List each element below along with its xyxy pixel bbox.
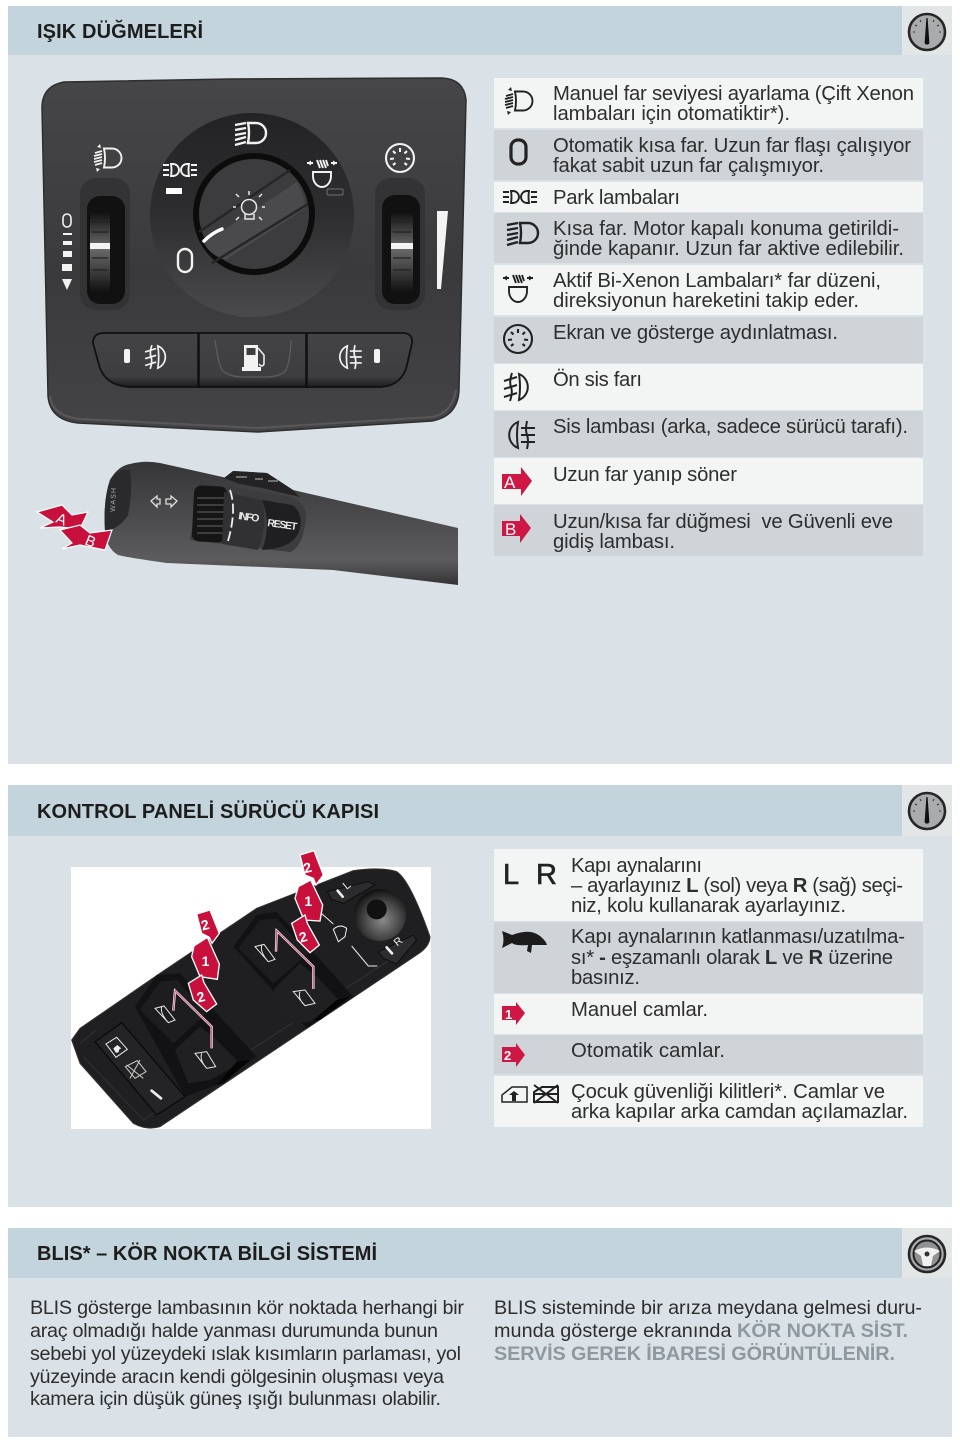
row: L R mirror select: L	[503, 859, 519, 891]
door switch photo: 1	[304, 893, 312, 909]
red arrows right group	[292, 851, 323, 953]
row: automatic: Otomatik kısa far. Uzun far flaşı çalışıyor	[553, 135, 911, 157]
row: manual windows: Manuel camlar.	[571, 999, 708, 1021]
row: B beam switch: Uzun/kısa far düğmesi ve Güvenli eve	[553, 511, 893, 533]
rotary disc	[150, 113, 354, 317]
left thumbwheel	[80, 178, 130, 310]
steering stalk photo: RESET	[267, 517, 299, 533]
legend table: light switches	[494, 78, 923, 556]
stalk callout arrows A and B	[37, 505, 112, 551]
steering stalk photo	[105, 462, 458, 585]
row: front fog	[494, 364, 923, 410]
text: right column: SERVİS GEREK İBARESİ GÖRÜNTÜLENİR.	[494, 1342, 895, 1365]
row: L R mirror select: – ayarlayınız L (sol) veya R (sağ) seçi-	[571, 875, 903, 897]
thumb wheel	[192, 485, 227, 543]
stalk callout arrows A and B: B	[83, 532, 98, 551]
row: automatic windows	[494, 1035, 923, 1074]
rotary knob	[193, 153, 315, 275]
text: left column: sebebi yol yüzeydeki ıslak kısımların parlaması, yol	[30, 1343, 461, 1365]
row: mirror folding: basınız.	[571, 967, 640, 989]
row: child safety	[494, 1076, 923, 1127]
row: rear fog	[494, 411, 923, 457]
panel: driver door control panel	[8, 785, 952, 1207]
row: automatic windows: Otomatik camlar.	[571, 1040, 725, 1062]
legend table: door control	[494, 849, 923, 1127]
row: L R mirror select: R	[536, 859, 557, 891]
heading bar: light switches	[8, 6, 952, 55]
text: left column: BLIS gösterge lambasının kör noktada herhangi bir	[30, 1297, 464, 1319]
stalk callout arrows A and B: A	[54, 510, 69, 529]
text: left column: kamera için düşük güneş ışığı bulunması olabilir.	[30, 1388, 441, 1410]
heading bar: BLIS	[8, 1228, 952, 1278]
heading bar: door control: KONTROL PANELİ SÜRÜCÜ KAPISI	[37, 800, 379, 823]
row: automatic windows: 2	[504, 1048, 511, 1063]
door switch photo: 1	[202, 953, 210, 969]
row: mirror folding: Kapı aynalarının katlanması/uzatılma-	[571, 926, 905, 948]
door switch photo: 2	[199, 916, 211, 934]
row: child safety: arka kapılar arka camdan açılamazlar.	[571, 1101, 908, 1123]
text: left column: araç olmadığı halde yanması durumunda bunun	[30, 1320, 438, 1342]
text: left column: yüzeyinde aracın kendi gölgesinin oluşması veya	[30, 1366, 444, 1388]
mirror control: R	[392, 935, 405, 949]
row: L R mirror select: niz, kolu kullanarak ayarlayınız.	[571, 895, 846, 917]
row: B beam switch: gidiş lambası.	[553, 531, 675, 553]
steering stalk photo: WASH	[110, 488, 118, 512]
row: rear fog: Sis lambası (arka, sadece sürücü tarafı).	[553, 416, 908, 438]
heading bar: door control	[8, 785, 952, 836]
knob position symbols	[94, 123, 414, 272]
row: A flash: Uzun far yanıp söner	[553, 464, 737, 486]
pink lead lines	[173, 931, 313, 1048]
mirror control: L	[341, 879, 353, 892]
left window switches	[135, 973, 257, 1097]
row: manual headlamp level: Manuel far seviyesi ayarlama (Çift Xenon	[553, 83, 914, 105]
mirror control	[318, 879, 417, 966]
row: mirror folding: sı* - eşzamanlı olarak L ve R üzerine	[571, 947, 893, 969]
row: A flash: A	[504, 473, 516, 492]
text: right column: BLIS sisteminde bir arıza meydana gelmesi duru-	[494, 1297, 922, 1319]
row: A flash	[494, 458, 923, 504]
right thumbwheel	[375, 178, 425, 310]
row: active bi-xenon	[494, 265, 923, 315]
bottom buttons	[93, 333, 412, 388]
heading bar: BLIS: BLIS* – KÖR NOKTA BİLGİ SİSTEMİ	[37, 1242, 377, 1265]
row: display illumination: Ekran ve gösterge aydınlatması.	[553, 322, 838, 344]
row: mirror folding	[494, 922, 923, 993]
row: low beam: Kısa far. Motor kapalı konuma getirildi-	[553, 218, 899, 240]
door switch photo	[71, 851, 431, 1129]
row: child safety: Çocuk güvenliği kilitleri*. Camlar ve	[571, 1081, 885, 1103]
left scale	[62, 214, 72, 290]
row: active bi-xenon: direksiyonun hareketini takip eder.	[553, 290, 859, 312]
row: automatic: fakat sabit uzun far çalışmıyor.	[553, 155, 824, 177]
row: B beam switch	[494, 505, 923, 556]
fuel pump symbol	[242, 345, 264, 371]
brightness wedge	[437, 211, 448, 289]
door switch photo: 2	[302, 859, 314, 876]
icon: gauge header	[909, 793, 945, 829]
text: left column	[30, 1297, 464, 1410]
row: manual windows: 1	[505, 1007, 512, 1022]
icon: steering wheel	[909, 1236, 945, 1272]
row: manual headlamp level: lambaları için otomatiktir*).	[553, 103, 790, 125]
switch recess	[190, 482, 306, 552]
row: L R mirror select	[494, 849, 923, 921]
row: L R mirror select: Kapı aynalarını	[571, 855, 702, 877]
heading bar: light switches: IŞIK DÜĞMELERİ	[37, 19, 203, 43]
row: manual windows	[494, 994, 923, 1034]
reset button	[262, 500, 301, 550]
row: automatic	[494, 130, 923, 180]
icon: gauge header	[909, 14, 945, 50]
row: active bi-xenon: Aktif Bi-Xenon Lambaları* far düzeni,	[553, 270, 881, 292]
door switch photo: 2	[297, 928, 309, 946]
right window switches	[233, 912, 353, 1028]
row: manual headlamp level	[494, 78, 923, 128]
text: right column: munda gösterge ekranında KÖR NOKTA SİST.	[494, 1319, 908, 1342]
row: B beam switch: B	[505, 520, 516, 539]
row: display illumination	[494, 317, 923, 363]
row: low beam: ğinde kapanır. Uzun far aktive edilebilir.	[553, 238, 904, 260]
light switch panel photo	[42, 78, 466, 432]
door switch photo: 2	[195, 988, 207, 1006]
red arrows left group	[188, 910, 219, 1012]
child lock switch	[95, 1023, 185, 1115]
row: low beam	[494, 213, 923, 263]
row: parking lights: Park lambaları	[553, 187, 680, 209]
row: front fog: Ön sis farı	[553, 369, 642, 391]
steering stalk photo: INFO	[238, 510, 260, 525]
panel: light switches	[8, 6, 952, 764]
panel: BLIS	[8, 1228, 952, 1437]
text: right column	[494, 1297, 922, 1365]
row: parking lights	[494, 182, 923, 212]
